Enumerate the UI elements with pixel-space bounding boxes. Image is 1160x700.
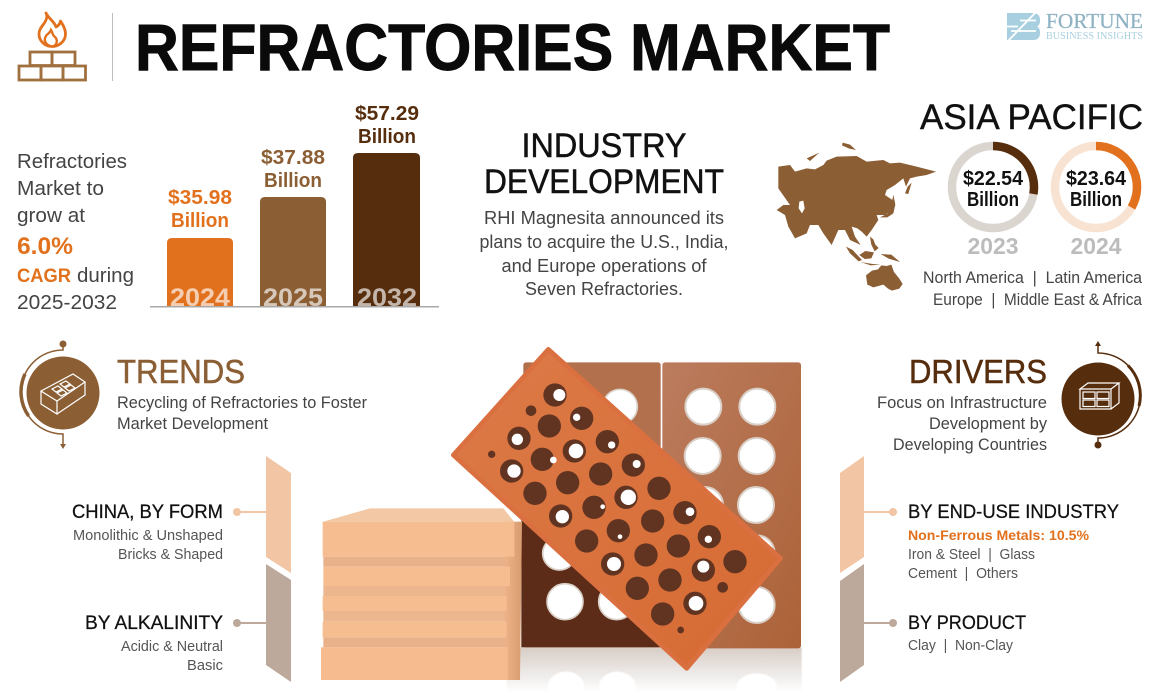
map: asia pacific [777,143,936,291]
donut chart: 2024: 2024 [1070,233,1122,259]
logo: Fortune Business Insights [1007,9,1143,42]
text block: industry news: plans to acquire the U.S., India, [480,232,728,252]
donut chart: 2024: $23.64 [1066,168,1127,190]
text block: trends: Recycling of Refractories to Foster [117,393,367,412]
panel: by alkalinity: Basic [187,657,223,674]
bar chart: market size [150,103,439,312]
panel: china by form [72,456,291,573]
text block: industry news: RHI Magnesita announced its [484,208,724,228]
bar 2025: $37.88 [261,147,325,169]
text block: other regions [923,268,1143,309]
back brick right [662,362,801,648]
text block: trends [117,393,367,433]
heading: industry development: INDUSTRY [522,127,686,165]
heading: industry development: DEVELOPMENT [484,163,724,201]
bar 2032: Billion [358,126,416,148]
bar 2032 [353,103,420,312]
panel: by end-use industry: BY END-USE INDUSTRY [908,502,1119,523]
bar 2024: Billion [171,210,229,232]
text block: drivers: Development by [929,414,1047,433]
bar 2025: 2025 [263,284,323,312]
panel: china by form: Bricks & Shaped [118,546,223,563]
floor reflection [507,647,802,700]
logo: Fortune Business Insights: BUSINESS INSIGHTS [1046,31,1143,42]
text block: other regions: North America | Latin America [923,268,1143,287]
panel: industry development [480,127,728,299]
icon: trends brick [21,340,99,449]
text block: CAGR statement [17,151,134,314]
header divider [112,13,113,81]
logo: Fortune Business Insights: FORTUNE [1046,9,1143,33]
donut chart: 2023: 2023 [968,233,1018,259]
front tilted brick [453,349,781,668]
donut chart: 2023: $22.54 [963,168,1024,190]
panel: by product [840,564,1026,682]
text block: drivers [877,393,1047,454]
text block: drivers: Developing Countries [893,435,1047,454]
front left brick [321,508,522,680]
panel: by alkalinity [85,564,291,682]
illustration: stacked bricks [321,349,802,700]
text block: CAGR statement: grow at [17,205,85,227]
donut chart: 2023: Billion [967,189,1019,211]
text block: CAGR statement: during [77,265,134,287]
text block: drivers: Focus on Infrastructure [877,393,1047,412]
panel: by end-use industry [840,456,1119,582]
donut chart: 2024 [1055,146,1137,259]
text block: trends: Market Development [117,414,268,433]
heading: drivers: DRIVERS [909,353,1047,390]
bar 2024: 2024 [170,284,230,312]
panel: by alkalinity: BY ALKALINITY [85,613,223,634]
donut chart: 2023 [952,146,1034,259]
panel: by end-use industry: Iron & Steel | Glass [908,546,1035,563]
text block: CAGR statement: CAGR [17,266,71,287]
text block: industry news [480,208,728,299]
donut chart: 2024: Billion [1070,189,1122,211]
heading: industry development [484,127,724,201]
text block: industry news: Seven Refractories. [525,279,683,299]
panel: china by form: Monolithic & Unshaped [73,527,223,544]
panel: by product: Clay | Non-Clay [908,637,1013,654]
text block: CAGR statement: Refractories [17,151,127,173]
panel: by end-use industry: Cement | Others [908,565,1018,582]
text block: CAGR statement: Market to [17,178,104,200]
icon: drivers brick [1062,341,1140,448]
text block: CAGR statement: 2025-2032 [17,292,117,314]
bar 2025 [260,147,326,312]
heading: trends: TRENDS [117,353,245,390]
bar 2032: 2032 [357,284,417,312]
back brick left [521,362,661,647]
panel: by product: BY PRODUCT [908,613,1026,634]
icon: flame on bricks [19,13,86,80]
panel: china by form: CHINA, BY FORM [72,502,223,523]
bar 2024: $35.98 [168,187,232,209]
bar 2025: Billion [264,170,322,192]
bar 2032: $57.29 [355,103,419,125]
panel: by alkalinity: Acidic & Neutral [121,638,223,655]
title: REFRACTORIES MARKET [135,10,890,84]
text block: industry news: and Europe operations of [502,256,708,276]
panel: by end-use industry: Non-Ferrous Metals: 10.5% [908,527,1090,543]
heading: asia pacific: ASIA PACIFIC [920,98,1143,137]
text block: CAGR statement: 6.0% [17,233,73,260]
text block: other regions: Europe | Middle East & Africa [933,290,1142,309]
bar 2024 [167,187,233,312]
